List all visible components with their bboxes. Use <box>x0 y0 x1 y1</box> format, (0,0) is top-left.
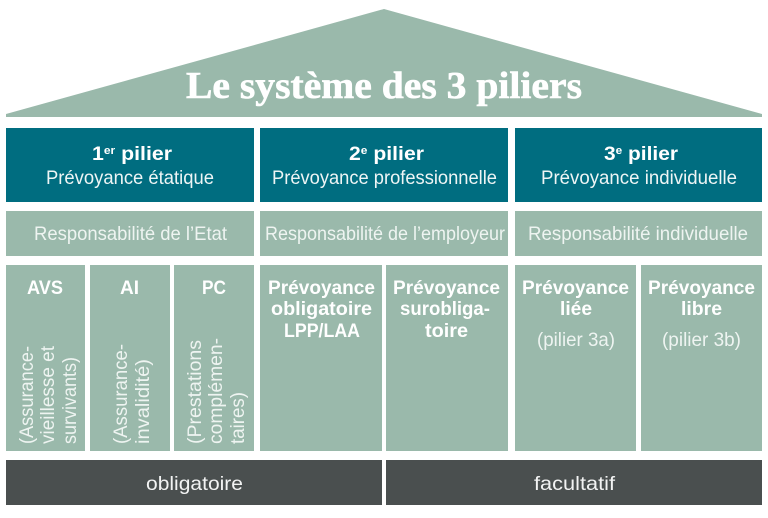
column: tied provision <box>515 265 636 451</box>
column: extra-mandatory provision: toire <box>425 320 468 342</box>
panel: pillar 2 header: 2 <box>349 143 360 165</box>
panel: individual responsibility <box>515 211 762 256</box>
panel: employer responsibility: Responsabilité de l’employeur <box>265 223 505 245</box>
panel: pillar 1 header: 1 <box>92 143 103 165</box>
bar: optional <box>386 460 762 505</box>
column: mandatory provision <box>260 265 382 451</box>
column: AVS: AVS <box>27 277 63 299</box>
panel: pillar 2 header: Prévoyance professionnelle <box>272 167 497 189</box>
column: tied provision: Prévoyance <box>522 277 629 299</box>
panel: pillar 2 header <box>260 128 508 202</box>
column: free provision <box>641 265 762 451</box>
column: mandatory provision: Prévoyance <box>268 277 375 299</box>
column: AI: AI <box>120 277 139 299</box>
panel: pillar 1 header <box>6 128 254 202</box>
panel: state responsibility <box>6 211 254 256</box>
panel: pillar 3 header: 3 <box>604 143 615 165</box>
column: AVS: vieillesse et <box>37 345 59 444</box>
column: AI: invalidité) <box>132 359 154 444</box>
panel: pillar 1 header: pilier <box>115 143 172 165</box>
panel: pillar 1 header: er <box>104 145 116 157</box>
roof with title <box>6 9 762 117</box>
column: PC: taires) <box>227 392 249 444</box>
panel: individual responsibility: Responsabilité individuelle <box>528 223 748 245</box>
column: free provision: Prévoyance <box>648 277 755 299</box>
column: PC: (Prestations <box>184 340 206 444</box>
column: free provision: (pilier 3b) <box>662 329 741 351</box>
panel: employer responsibility <box>260 211 508 256</box>
column: AI: (Assurance- <box>110 344 132 444</box>
panel: pillar 2 header: pilier <box>367 143 424 165</box>
column: extra-mandatory provision: surobliga- <box>400 298 490 320</box>
panel: pillar 2 header: e <box>361 145 367 157</box>
bar: mandatory: obligatoire <box>146 473 243 495</box>
column: mandatory provision: LPP/LAA <box>284 320 360 342</box>
panel: pillar 1 header: Prévoyance étatique <box>46 167 214 189</box>
column: AVS: survivants) <box>59 357 81 444</box>
column: AI <box>90 265 170 451</box>
column: extra-mandatory provision <box>386 265 508 451</box>
column: extra-mandatory provision: Prévoyance <box>393 277 500 299</box>
column: PC: PC <box>202 277 226 299</box>
column: AVS <box>6 265 85 451</box>
panel: pillar 3 header: pilier <box>622 143 678 165</box>
panel: pillar 3 header <box>515 128 762 202</box>
column: tied provision: liée <box>560 298 592 320</box>
bar: optional: facultatif <box>534 473 616 495</box>
column: tied provision: (pilier 3a) <box>537 329 615 351</box>
panel: pillar 3 header: Prévoyance individuelle <box>541 167 737 189</box>
column: PC <box>174 265 254 451</box>
column: free provision: libre <box>681 298 722 320</box>
title: Le système des 3 piliers <box>186 65 582 107</box>
column: AVS: (Assurance- <box>16 346 38 444</box>
column: PC: complémen- <box>205 338 227 444</box>
column: mandatory provision: obligatoire <box>271 298 372 320</box>
panel: state responsibility: Responsabilité de l’Etat <box>34 223 228 245</box>
panel: pillar 3 header: e <box>616 145 622 157</box>
bar: mandatory <box>6 460 382 505</box>
